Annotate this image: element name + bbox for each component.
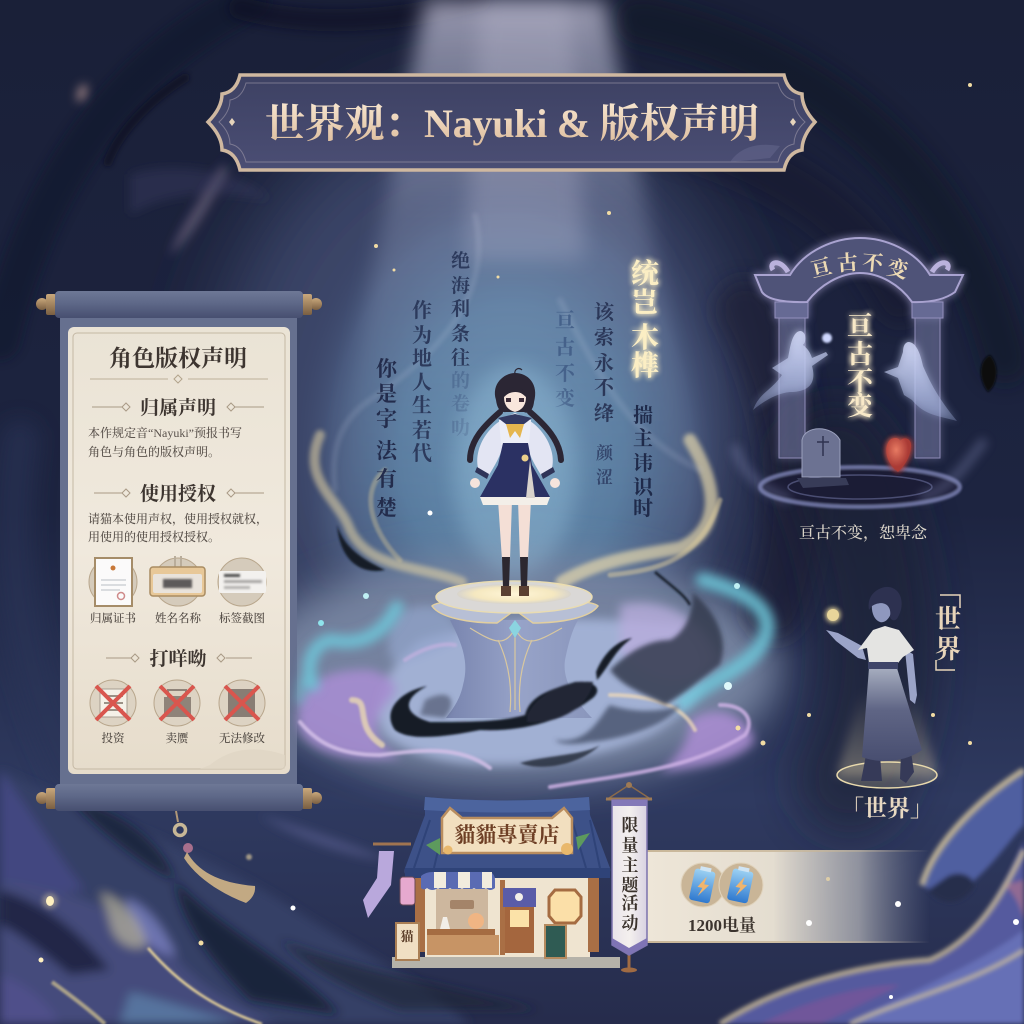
shop window <box>427 889 499 955</box>
skirt <box>480 443 550 497</box>
column: 揣主讳识时: 揣主讳识时 <box>633 404 655 520</box>
section: 使用授权: 使用授权 <box>140 483 216 505</box>
hanging flag <box>363 844 411 918</box>
section: 使用授权: 请猫本使用声权，使用授权就权， <box>88 511 268 526</box>
right arm <box>905 650 917 704</box>
bottom left flow <box>0 770 470 1024</box>
icon: tag screenshot <box>218 558 266 606</box>
panel: copyright scroll <box>36 291 322 811</box>
pigtails <box>470 412 561 460</box>
shirt <box>858 626 914 663</box>
label: 姓名名称: 姓名名称 <box>155 611 201 625</box>
socks and shoes <box>502 557 528 588</box>
glowing ring <box>837 762 937 788</box>
mauve glow streaks <box>75 83 270 255</box>
section: 打咩呦: 打咩呦 <box>149 648 207 670</box>
section: 打咩呦 <box>106 648 252 670</box>
head <box>872 598 892 622</box>
boots <box>861 752 914 783</box>
arch title: 古 <box>836 250 859 276</box>
ink brush strokes <box>337 525 690 767</box>
orb <box>827 609 839 621</box>
icon: tassel ornament <box>174 811 255 903</box>
section: 归属声明: 本作规定音“Nayuki”预报书写 <box>88 425 242 440</box>
vertical text: 亘古不变: 亘古不变 <box>847 312 874 421</box>
banner text: 限量主题活动 <box>622 816 638 933</box>
left arm <box>826 630 866 660</box>
tombstone <box>797 429 849 488</box>
scroll top rod <box>36 291 322 318</box>
label: 卖赝: 卖赝 <box>166 731 189 745</box>
bottom right flow <box>720 770 1024 1024</box>
label: 投资: 投资 <box>102 731 125 745</box>
pedestal <box>432 581 598 718</box>
icon: battery tokens <box>681 863 763 907</box>
title plaque <box>208 75 815 170</box>
arch pillars and cornice <box>755 238 963 458</box>
central swirl cloud <box>298 525 767 787</box>
column: 颜涩: 颜涩 <box>596 444 614 487</box>
icon: forbidden editing <box>219 680 265 726</box>
cyan ribbons <box>300 580 767 703</box>
section: 使用授权: 用使用的使用授权授权。 <box>88 529 220 544</box>
face <box>504 392 526 412</box>
dark ink arcs <box>0 0 1005 780</box>
scroll backing <box>60 314 297 788</box>
label: 标签截图: 标签截图 <box>219 611 265 625</box>
belt <box>868 662 898 669</box>
arch title <box>808 250 912 284</box>
arch title: 亘 <box>808 254 834 282</box>
ghost left <box>753 331 828 410</box>
lavender and gold edges <box>300 644 749 787</box>
column: 亘古不变: 亘古不变 <box>555 309 576 410</box>
lantern <box>400 877 415 905</box>
column: 该索永不绛: 该索永不绛 <box>593 301 616 425</box>
illustration: eternal archway <box>735 238 985 542</box>
vertical label: 世界 <box>935 605 961 664</box>
section: 归属声明: 归属声明 <box>140 397 216 419</box>
awning <box>421 872 495 890</box>
shop sign: 貓貓專賣店 <box>454 823 560 847</box>
wisp flower <box>822 333 832 343</box>
parchment <box>68 327 290 774</box>
label: 归属证书: 归属证书 <box>90 611 136 625</box>
title text: 世界观：Nayuki & 版权声明 <box>265 101 759 146</box>
label: 1200电量: 1200电量 <box>688 916 756 935</box>
limited event banner <box>606 782 652 972</box>
ghost right <box>884 342 957 421</box>
illustration: world figure <box>826 587 961 821</box>
column: 作为地人生若代: 作为地人生若代 <box>412 299 432 465</box>
heading: 角色版权声明: 角色版权声明 <box>109 346 247 371</box>
character: Nayuki girl <box>453 365 577 596</box>
column: 绝海利条往: 绝海利条往 <box>451 250 470 369</box>
icon: forbidden selling <box>154 680 200 726</box>
bottom label: 「世界」 <box>841 796 933 821</box>
heading: 角色版权声明 <box>90 346 268 383</box>
sleeves <box>477 421 553 475</box>
caption: 亘古不变，恕卑念 <box>799 523 928 542</box>
posts <box>415 868 599 955</box>
stand sign <box>396 923 419 960</box>
calligraphy text columns <box>376 250 661 520</box>
icon: name badge <box>150 556 205 606</box>
column: 你是字法有楚: 你是字法有楚 <box>376 357 399 520</box>
heart <box>886 438 911 472</box>
cloud body <box>298 603 754 772</box>
legs <box>498 500 531 560</box>
swirl ripple <box>735 440 985 507</box>
shop base <box>392 957 620 968</box>
arch title: 变 <box>885 255 912 284</box>
blouse <box>499 413 531 445</box>
arch title: 不 <box>861 250 885 276</box>
section: 归属声明 <box>88 397 264 459</box>
icon: forbidden investing <box>90 680 136 726</box>
shop sign <box>426 808 590 855</box>
column: glowing 统岂木榫: 统岂木榫 <box>631 258 661 382</box>
scroll bottom rod <box>36 784 322 811</box>
section: 使用授权 <box>88 483 268 544</box>
roof <box>404 797 610 878</box>
label: 无法修改: 无法修改 <box>219 731 265 745</box>
gold wisps <box>314 215 720 582</box>
hair <box>869 587 902 620</box>
illustration: cat shop <box>363 797 620 968</box>
reward strip <box>645 850 930 943</box>
long skirt <box>862 668 922 761</box>
section: 归属声明: 角色与角色的版权声明。 <box>88 444 220 459</box>
column: 的卷叻: 的卷叻 <box>451 370 470 439</box>
door and curtain <box>503 888 536 953</box>
stand sign: 猫 <box>400 929 414 944</box>
chalkboard <box>545 925 566 958</box>
shop walls <box>425 872 590 957</box>
hair back <box>495 373 535 413</box>
icon: certificate <box>89 558 137 606</box>
octagon window <box>549 890 581 923</box>
